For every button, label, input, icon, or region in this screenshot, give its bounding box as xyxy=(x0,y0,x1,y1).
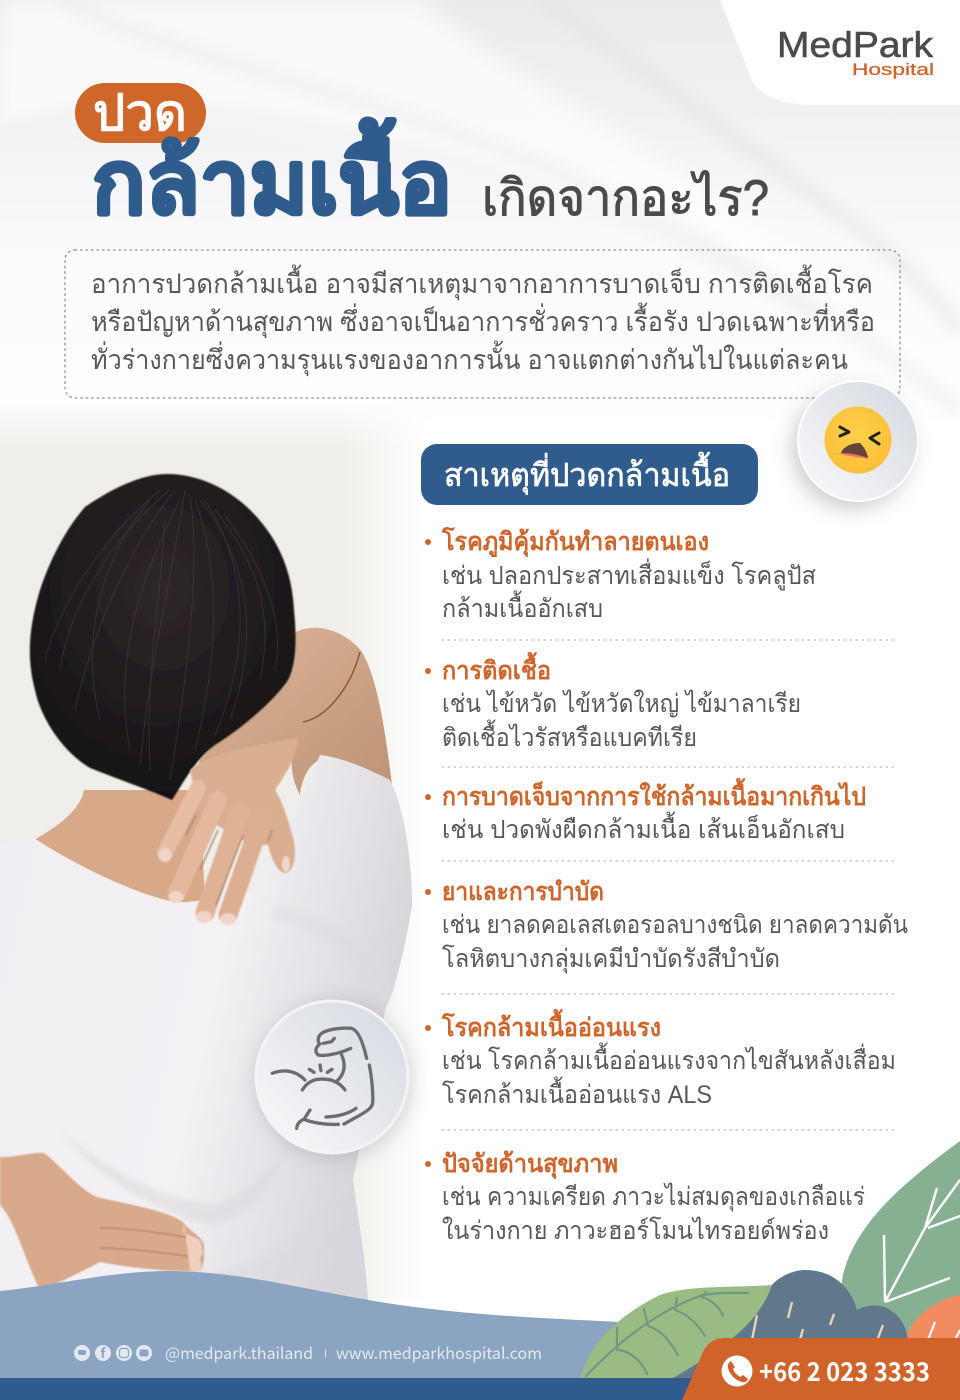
item: medication: เช่น ยาลดคอเลสเตอรอลบางชนิด ยาลดความดัน xyxy=(442,911,908,939)
item: muscle weakness disease xyxy=(425,1008,896,1109)
footer contact text: @medpark.thailand xyxy=(165,1340,313,1364)
social icons xyxy=(74,1343,152,1362)
phone number: +66 2 023 3333 xyxy=(759,1352,930,1389)
item: health factors: ปัจจัยด้านสุขภาพ xyxy=(442,1150,618,1180)
leaf: big green xyxy=(841,1141,960,1345)
item: autoimmune: โรคภูมิคุ้มกันทำลายตนเอง xyxy=(441,526,709,558)
item: medication xyxy=(425,878,908,974)
footer wave xyxy=(0,1271,700,1378)
footer contact text: www.medparkhospital.com xyxy=(336,1340,542,1364)
item: medication: โลหิตบางกลุ่มเคมีบำบัดรังสีบำบัด xyxy=(442,944,780,974)
shirt xyxy=(0,755,412,1300)
leaf: light green xyxy=(580,1285,772,1378)
leaf: dark blue blob xyxy=(673,1270,908,1378)
item: infection xyxy=(425,651,801,752)
social icons: f xyxy=(100,1343,106,1362)
icon: phone xyxy=(722,1356,752,1386)
title xyxy=(75,83,769,232)
item: overuse injury: เช่น ปวดพังผืดกล้ามเนื้อ เส้นเอ็นอักเสบ xyxy=(442,811,845,844)
phone block xyxy=(682,1338,960,1400)
footer contact text xyxy=(165,1340,542,1364)
item: infection: เช่น ไข้หวัด ไข้หวัดใหญ่ ไข้มาลาเรีย xyxy=(442,689,801,718)
hand on lower back xyxy=(0,1153,204,1290)
neck xyxy=(34,790,205,905)
intro box: ทั่วร่างกายซึ่งความรุนแรงของอาการนั้น อาจแตกต่างกันไปในแต่ละคน xyxy=(91,340,848,377)
item: medication: ยาและการบำบัด xyxy=(442,878,604,906)
intro box: อาการปวดกล้ามเนื้อ อาจมีสาเหตุมาจากอาการบาดเจ็บ การติดเชื้อโรค xyxy=(91,264,873,301)
title tag: orange pill: ปวด xyxy=(93,85,187,141)
logo: Hospital xyxy=(852,60,934,79)
item: infection: การติดเชื้อ xyxy=(442,651,551,685)
logo xyxy=(777,24,934,79)
photo: woman holding her neck and back xyxy=(0,474,412,1300)
intro box: หรือปัญหาด้านสุขภาพ ซึ่งอาจเป็นอาการชั่วคราว เรื้อรัง ปวดเฉพาะที่หรือ xyxy=(91,302,875,339)
hair xyxy=(30,474,296,800)
item: autoimmune: เช่น ปลอกประสาทเสื่อมแข็ง โรคลูปัส xyxy=(442,558,816,591)
item: health factors: ในร่างกาย ภาวะฮอร์โมนไทรอยด์พร่อง xyxy=(442,1216,829,1245)
footer dark bar xyxy=(0,1378,960,1400)
section heading pill: สาเหตุที่ปวดกล้ามเนื้อ xyxy=(444,452,730,495)
icon: muscle arm on plate xyxy=(256,1001,412,1158)
title tag: orange pill xyxy=(75,83,206,143)
title main word: กล้ามเนื้อ xyxy=(92,118,452,232)
background: silk folds xyxy=(0,0,960,420)
item: autoimmune xyxy=(425,526,816,623)
leaf: orange xyxy=(905,1295,960,1340)
item: infection: ติดเชื้อไวรัสหรือแบคทีเรีย xyxy=(442,719,697,752)
icon: pained face on plate xyxy=(792,381,918,509)
intro box xyxy=(65,250,900,398)
item: muscle weakness disease: เช่น โรคกล้ามเนื้ออ่อนแรงจากไขสันหลังเสื่อม xyxy=(442,1042,896,1075)
title suffix: เกิดจากอะไร? xyxy=(482,170,769,226)
hand on neck xyxy=(158,738,298,925)
item: overuse injury: การบาดเจ็บจากการใช้กล้ามเนื้อมากเกินไป xyxy=(442,777,866,811)
background: photo backdrop xyxy=(0,400,425,1300)
logo: MedPark xyxy=(777,24,934,65)
section heading pill xyxy=(421,444,758,505)
arm raised to the neck xyxy=(195,628,392,795)
item: health factors xyxy=(425,1150,865,1245)
item: muscle weakness disease: โรคกล้ามเนื้ออ่อนแรง xyxy=(441,1008,661,1042)
item: muscle weakness disease: โรคกล้ามเนื้ออ่อนแรง ALS xyxy=(442,1076,712,1109)
item: autoimmune: กล้ามเนื้ออักเสบ xyxy=(442,590,603,623)
item: health factors: เช่น ความเครียด ภาวะไม่สมดุลของเกลือแร่ xyxy=(442,1182,865,1212)
logo panel xyxy=(720,0,960,105)
item: overuse injury xyxy=(425,777,866,844)
